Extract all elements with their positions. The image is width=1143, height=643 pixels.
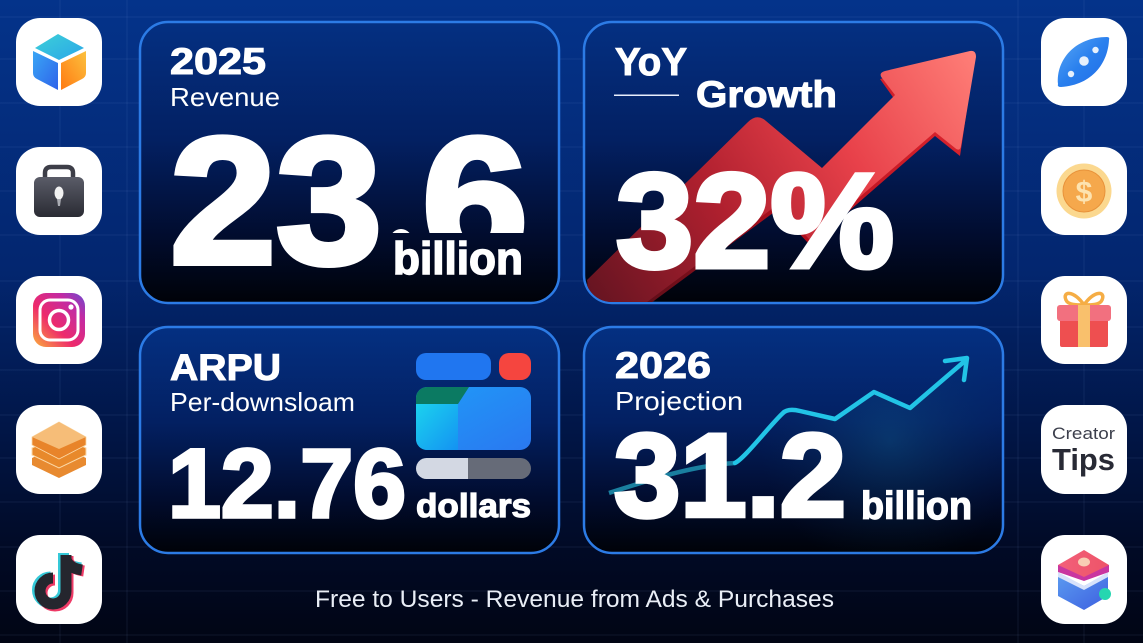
icon: gift — [1041, 276, 1127, 364]
icon: creator tips: Tips — [1052, 442, 1115, 477]
left icon column — [16, 18, 102, 624]
value: 32%: 32% — [616, 147, 894, 296]
caption: Free to Users - Revenue from Ads & Purchases — [315, 586, 834, 613]
arrow: red growth — [587, 51, 976, 306]
icon: app layout — [416, 353, 531, 479]
divider line — [614, 94, 679, 96]
unit: billion: billion — [393, 233, 523, 284]
panel: yoy growth — [584, 22, 1003, 306]
value: clipped decimal .6 — [392, 134, 524, 233]
icon: tiktok — [16, 535, 102, 624]
heading: 2026: 2026 — [615, 345, 711, 386]
icon: layers — [16, 405, 102, 494]
icon: cube — [16, 18, 102, 106]
panel: 2026 projection — [584, 327, 1003, 553]
panel: 2025 revenue — [140, 22, 559, 303]
label: revenue: Revenue — [170, 82, 280, 112]
icon: coin — [1041, 147, 1127, 235]
icon: box — [1041, 535, 1127, 624]
chart: projection line — [608, 356, 970, 534]
panel: arpu — [140, 327, 559, 553]
icon: instagram — [16, 276, 102, 364]
icon: creator tips: Creator — [1052, 424, 1115, 443]
label: projection: Projection — [615, 386, 743, 416]
heading: 2025: 2025 — [170, 41, 266, 82]
unit: billion: billion — [861, 485, 972, 528]
value: 31.2: 31.2 — [614, 410, 846, 542]
heading: yoy: YoY — [615, 41, 687, 84]
value: 23: 23 — [170, 101, 382, 302]
value: clipped decimal .6: 6 — [422, 101, 528, 302]
unit: dollars: dollars — [416, 487, 531, 524]
icon: creator tips — [1041, 405, 1127, 494]
icon: lock briefcase — [16, 147, 102, 235]
heading: arpu: ARPU — [170, 347, 281, 388]
right icon column — [1041, 18, 1127, 624]
label: per-downsloam: Per-downsloam — [170, 387, 355, 417]
icon: leaf — [1041, 18, 1127, 106]
value: 12.76: 12.76 — [168, 429, 406, 538]
heading: growth: Growth — [696, 74, 837, 115]
icon: coin: $ — [1076, 176, 1093, 209]
